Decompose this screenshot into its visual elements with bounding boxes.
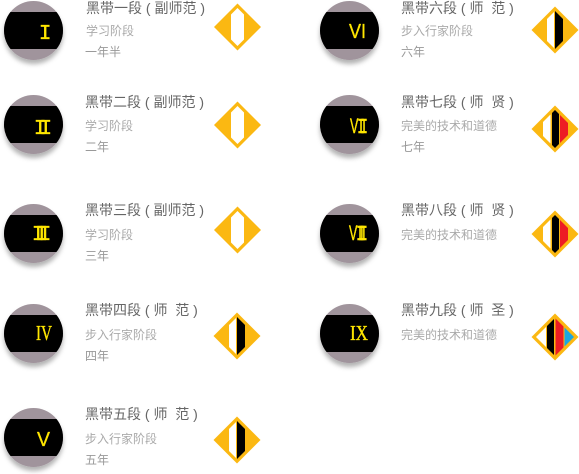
title: 黑带九段 ( 师 圣 ) — [401, 302, 514, 318]
title: 黑带八段 ( 师 贤 ) — [401, 202, 514, 218]
title: 黑带一段 ( 副师范 ) — [86, 0, 205, 16]
stage: 完美的技术和道德 — [401, 327, 497, 342]
title: 黑带四段 ( 师 范 ) — [85, 302, 198, 318]
panel: rank 2 — [4, 94, 261, 154]
badge: IX — [320, 304, 380, 363]
badge: IV: IV — [36, 321, 52, 345]
panel: rank 5 — [4, 406, 260, 467]
duration: 七年 — [401, 140, 425, 154]
panel: rank 4 — [4, 302, 260, 363]
badge: V: V — [37, 429, 51, 451]
stage: 完美的技术和道德 — [401, 227, 497, 242]
icon: diamond rank 2 — [214, 102, 261, 148]
badge: II: II — [34, 118, 51, 141]
duration: 二年 — [85, 140, 109, 154]
badge: VIII: VIII — [349, 221, 367, 247]
duration: 四年 — [85, 349, 109, 363]
stage: 学习阶段 — [85, 227, 133, 242]
stage: 完美的技术和道德 — [401, 118, 497, 133]
badge: III: III — [32, 224, 50, 247]
icon: diamond rank 9 — [532, 314, 578, 360]
badge: III — [4, 204, 64, 263]
badge: V — [4, 408, 64, 467]
icon: diamond rank 8 — [532, 210, 578, 258]
stage: 步入行家阶段 — [85, 431, 157, 446]
panel: rank 9 — [320, 302, 578, 363]
duration: 六年 — [401, 45, 425, 59]
title: 黑带二段 ( 副师范 ) — [85, 94, 204, 110]
duration: 五年 — [85, 453, 109, 467]
badge: IV — [4, 304, 64, 363]
badge: VIII — [320, 204, 380, 263]
badge: VI: VI — [349, 21, 366, 43]
title: 黑带七段 ( 师 贤 ) — [401, 94, 514, 110]
duration: 一年半 — [85, 45, 121, 59]
stage: 步入行家阶段 — [85, 327, 157, 342]
badge: IX: IX — [350, 321, 368, 345]
badge: VII — [320, 95, 380, 154]
title: 黑带六段 ( 师 范 ) — [401, 0, 514, 16]
icon: diamond rank 1 — [214, 4, 261, 50]
panel: rank 6 — [320, 0, 578, 60]
panel: rank 7 — [320, 94, 578, 154]
stage: 学习阶段 — [85, 118, 133, 133]
badge: I — [4, 1, 64, 60]
icon: diamond rank 7 — [532, 106, 578, 152]
stage: 学习阶段 — [86, 23, 134, 38]
title: 黑带三段 ( 副师范 ) — [85, 202, 204, 218]
title: 黑带五段 ( 师 范 ) — [85, 406, 198, 422]
icon: diamond rank 5 — [214, 416, 260, 464]
badge: VI — [320, 1, 380, 60]
duration: 三年 — [85, 249, 109, 263]
stage: 步入行家阶段 — [401, 23, 473, 38]
panel: rank 8 — [320, 202, 578, 263]
icon: diamond rank 6 — [532, 6, 578, 54]
badge: I: I — [39, 23, 52, 46]
panel: rank 1 — [4, 0, 261, 60]
badge: VII: VII — [350, 114, 367, 140]
badge: II — [4, 95, 64, 154]
icon: diamond rank 4 — [214, 312, 260, 360]
panel: rank 3 — [4, 202, 261, 263]
icon: diamond rank 3 — [214, 206, 261, 254]
